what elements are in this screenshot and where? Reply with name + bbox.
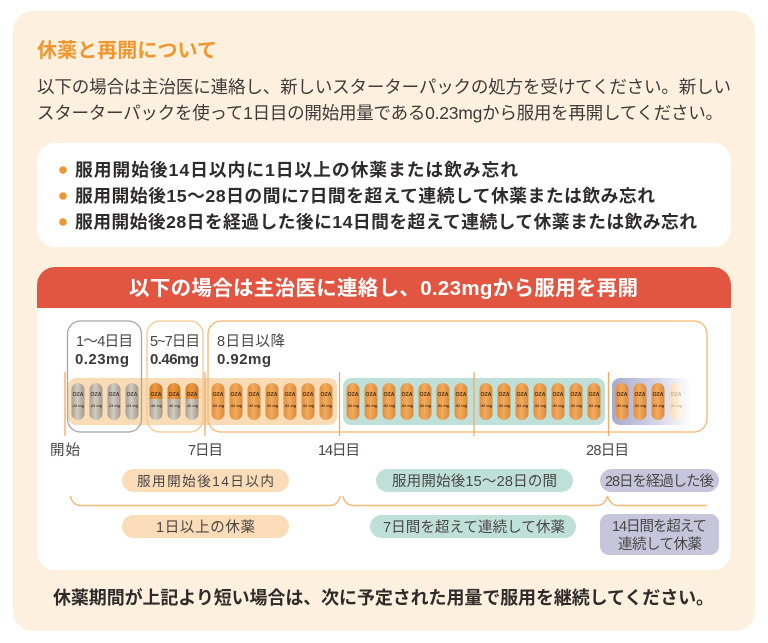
capsules: 0.92 mg, days 22-28: .92 mg — [516, 404, 529, 408]
break box: more than 14 days: 連続して休薬 — [618, 536, 702, 553]
capsules: 0.92 mg, days 8-14: OZA — [285, 392, 296, 398]
capsules: 0.92 mg, days 22-28: OZA — [481, 392, 492, 398]
capsules: 0.46 mg: .46 mg — [150, 404, 163, 408]
capsules: 0.92 mg, days 15-21: .92 mg — [419, 404, 432, 408]
capsules: 0.92 mg, days 8-14: OZA — [267, 392, 278, 398]
break box: more than 14 days: 14日間を超えて — [612, 518, 707, 535]
capsules: 0.92 mg, days 15-21: .92 mg — [455, 404, 468, 408]
schedule header: 以下の場合は主治医に連絡し、0.23mgから服用を再開 — [129, 276, 638, 300]
capsules: 0.23 mg: .23 mg — [72, 404, 85, 408]
capsules: 0.92 mg, days 22-28: OZA — [517, 392, 528, 398]
capsules: after day 28: OZA — [635, 392, 646, 398]
bullet: days 15 to 28: 服用開始後15～28日の間に7日間を超えて連続して休薬または飲み忘れ — [75, 186, 655, 206]
capsules: 0.23 mg: OZA — [109, 392, 120, 398]
dose box: day 8 onward — [208, 321, 707, 432]
panel: conditions list — [37, 143, 731, 247]
capsules: after day 28: OZA — [653, 392, 664, 398]
capsules: 0.92 mg, days 15-21 — [346, 383, 468, 420]
title: 休薬と再開について — [37, 39, 217, 62]
capsules: 0.92 mg, days 22-28: .92 mg — [480, 404, 493, 408]
capsules: 0.92 mg, days 8-14: .92 mg — [212, 404, 225, 408]
dose box: days 1-4 — [68, 321, 142, 432]
capsules: 0.46 mg: OZA — [169, 392, 180, 398]
capsules: 0.92 mg, days 15-21: .92 mg — [365, 404, 378, 408]
capsules: 0.46 mg: .46 mg — [168, 404, 181, 408]
timeline labels: 14日目 — [318, 443, 360, 459]
dose box: day 8 onward: 8日目以降 — [217, 333, 286, 350]
capsules: after day 28: .92 mg — [634, 404, 647, 408]
closing note: 休薬期間が上記より短い場合は、次に予定された用量で服用を継続してください。 — [53, 587, 714, 608]
capsules: 0.92 mg, days 22-28: .92 mg — [588, 404, 601, 408]
capsules: 0.92 mg, days 22-28: OZA — [553, 392, 564, 398]
capsules: 0.92 mg, days 15-21: OZA — [456, 392, 467, 398]
capsules: 0.23 mg: OZA — [127, 392, 138, 398]
capsules: 0.92 mg, days 22-28 — [480, 383, 601, 420]
period pill: within 14 days — [122, 469, 289, 492]
capsules: 0.92 mg, days 8-14: .92 mg — [230, 404, 243, 408]
bullet: after 28 days: 服用開始後28日を経過した後に14日間を超えて連続して休薬または飲み忘れ — [75, 212, 697, 232]
capsules: 0.92 mg, days 22-28: .92 mg — [534, 404, 547, 408]
period pill: within 14 days: 服用開始後14日以内 — [137, 474, 274, 489]
capsules: 0.92 mg, days 22-28: .92 mg — [570, 404, 583, 408]
capsules: 0.92 mg, days 22-28: OZA — [499, 392, 510, 398]
capsules: 0.92 mg, days 15-21: OZA — [348, 392, 359, 398]
capsules: 0.92 mg, days 22-28: OZA — [535, 392, 546, 398]
period pill: days 15-28 — [376, 469, 573, 492]
capsules: after day 28: .92 mg — [616, 404, 629, 408]
capsules: 0.92 mg, days 15-21: .92 mg — [401, 404, 414, 408]
capsules: 0.23 mg: .23 mg — [90, 404, 103, 408]
period pill: after 28 days: 28日を経過した後 — [605, 473, 714, 490]
intro text: スターターパックを使って1日目の開始用量である0.23mgから服用を再開してください。 — [37, 103, 723, 123]
capsules: 0.92 mg, days 8-14: OZA — [303, 392, 314, 398]
break pill: more than 7 days — [370, 515, 576, 538]
capsules: 0.46 mg: OZA — [187, 392, 198, 398]
brackets — [70, 496, 707, 506]
capsules: 0.23 mg: .23 mg — [108, 404, 121, 408]
dose box: days 5-7: 0.46mg — [150, 351, 199, 368]
capsules: 0.92 mg, days 8-14: .92 mg — [284, 404, 297, 408]
dose box: days 5-7 — [147, 321, 203, 432]
capsules: 0.23 mg: OZA — [91, 392, 102, 398]
capsules: after day 28: OZA — [617, 392, 628, 398]
capsules: 0.92 mg, days 15-21: OZA — [384, 392, 395, 398]
period pill: days 15-28: 服用開始後15～28日の間 — [392, 473, 557, 490]
timeline labels: 7日目 — [188, 443, 223, 459]
period pill: after 28 days — [600, 469, 719, 492]
break box: more than 14 days — [600, 514, 719, 555]
capsules: after day 28: .92 mg — [652, 404, 665, 408]
capsules: after day 28: .92 mg — [670, 404, 683, 408]
dose box: days 5-7: 5~7日目 — [150, 334, 200, 350]
capsules: 0.92 mg, days 22-28: .92 mg — [498, 404, 511, 408]
capsules: 0.92 mg, days 15-21: .92 mg — [437, 404, 450, 408]
capsules: 0.46 mg: .46 mg — [186, 404, 199, 408]
capsules: 0.23 mg: OZA — [73, 392, 84, 398]
capsules: 0.92 mg, days 22-28: OZA — [589, 392, 600, 398]
capsules: 0.92 mg, days 22-28: OZA — [571, 392, 582, 398]
capsules: 0.92 mg, days 15-21: .92 mg — [383, 404, 396, 408]
break pill: more than 7 days: 7日間を超えて連続して休薬 — [383, 519, 565, 536]
capsules: 0.92 mg, days 8-14: OZA — [321, 392, 332, 398]
dose box: day 8 onward: 0.92mg — [217, 351, 271, 368]
dose box: days 1-4: 0.23mg — [75, 351, 129, 368]
capsules: 0.92 mg, days 15-21: OZA — [438, 392, 449, 398]
capsules: 0.46 mg — [150, 383, 199, 420]
timeline labels — [50, 442, 629, 459]
capsules: 0.92 mg, days 8-14: .92 mg — [302, 404, 315, 408]
intro text: 以下の場合は主治医に連絡し、新しいスターターパックの処方を受けてください。新しい — [37, 77, 731, 97]
capsules: after day 28: OZA — [671, 392, 682, 398]
bullet: within 14 days: 服用開始後14日以内に1日以上の休薬または飲み忘れ — [75, 160, 518, 180]
dose box: days 1-4: 1～4日目 — [76, 334, 133, 350]
capsules: 0.92 mg, days 8-14: .92 mg — [320, 404, 333, 408]
capsules: 0.92 mg, days 15-21: OZA — [402, 392, 413, 398]
timeline bands — [68, 378, 692, 425]
panel: restart schedule — [37, 267, 731, 570]
capsules: 0.92 mg, days 15-21: OZA — [420, 392, 431, 398]
timeline labels: 28日目 — [586, 443, 629, 459]
capsules: 0.23 mg — [72, 383, 139, 420]
timeline labels: 開始 — [50, 442, 80, 459]
schedule header — [37, 267, 731, 308]
capsules: 0.92 mg, days 8-14 — [212, 383, 333, 420]
capsules: 0.92 mg, days 8-14: OZA — [231, 392, 242, 398]
capsules: 0.46 mg: OZA — [151, 392, 162, 398]
break pill: one day or more — [122, 515, 289, 538]
capsules: 0.92 mg, days 15-21: OZA — [366, 392, 377, 398]
capsules: 0.92 mg, days 8-14: OZA — [249, 392, 260, 398]
capsules: 0.92 mg, days 22-28: .92 mg — [552, 404, 565, 408]
capsules: 0.92 mg, days 8-14: .92 mg — [266, 404, 279, 408]
intro text — [37, 77, 731, 123]
capsules: 0.92 mg, days 8-14: OZA — [213, 392, 224, 398]
capsules: 0.92 mg, days 15-21: .92 mg — [347, 404, 360, 408]
capsules: 0.23 mg: .23 mg — [126, 404, 139, 408]
capsules: 0.92 mg, days 8-14: .92 mg — [248, 404, 261, 408]
break pill: one day or more: 1日以上の休薬 — [156, 519, 255, 536]
capsules: after day 28 — [616, 383, 683, 420]
